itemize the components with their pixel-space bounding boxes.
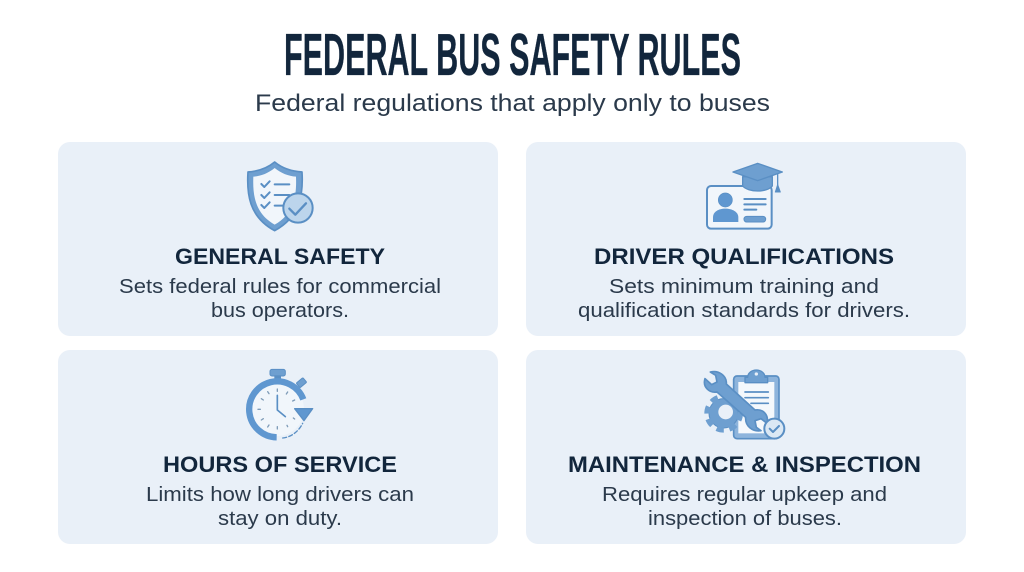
icon: wrench, gear and clipboard — [704, 370, 784, 439]
heading: DRIVER QUALIFICATIONS — [594, 244, 894, 269]
description — [146, 484, 414, 530]
panel: maintenance and inspection — [526, 350, 966, 544]
panel: hours of service — [58, 350, 498, 544]
heading: GENERAL SAFETY — [175, 244, 385, 269]
icon: stopwatch — [249, 369, 313, 438]
icon: ID card with graduation cap — [707, 163, 782, 229]
icon: shield with checklist — [248, 162, 313, 231]
subtitle: Federal regulations that apply only to buses — [255, 90, 770, 117]
description: inspection of buses. — [648, 508, 842, 530]
panel: general safety — [58, 142, 498, 336]
panel: driver qualifications — [526, 142, 966, 336]
description — [578, 276, 910, 322]
heading: HOURS OF SERVICE — [163, 452, 397, 477]
description: Sets minimum training and — [609, 276, 879, 298]
description: stay on duty. — [218, 508, 342, 530]
description: Requires regular upkeep and — [602, 484, 887, 506]
heading: MAINTENANCE & INSPECTION — [568, 452, 921, 477]
description: qualification standards for drivers. — [578, 300, 910, 322]
description — [602, 484, 887, 530]
description: bus operators. — [211, 300, 349, 322]
description: Limits how long drivers can — [146, 484, 414, 506]
description — [119, 276, 441, 322]
description: Sets federal rules for commercial — [119, 276, 441, 298]
